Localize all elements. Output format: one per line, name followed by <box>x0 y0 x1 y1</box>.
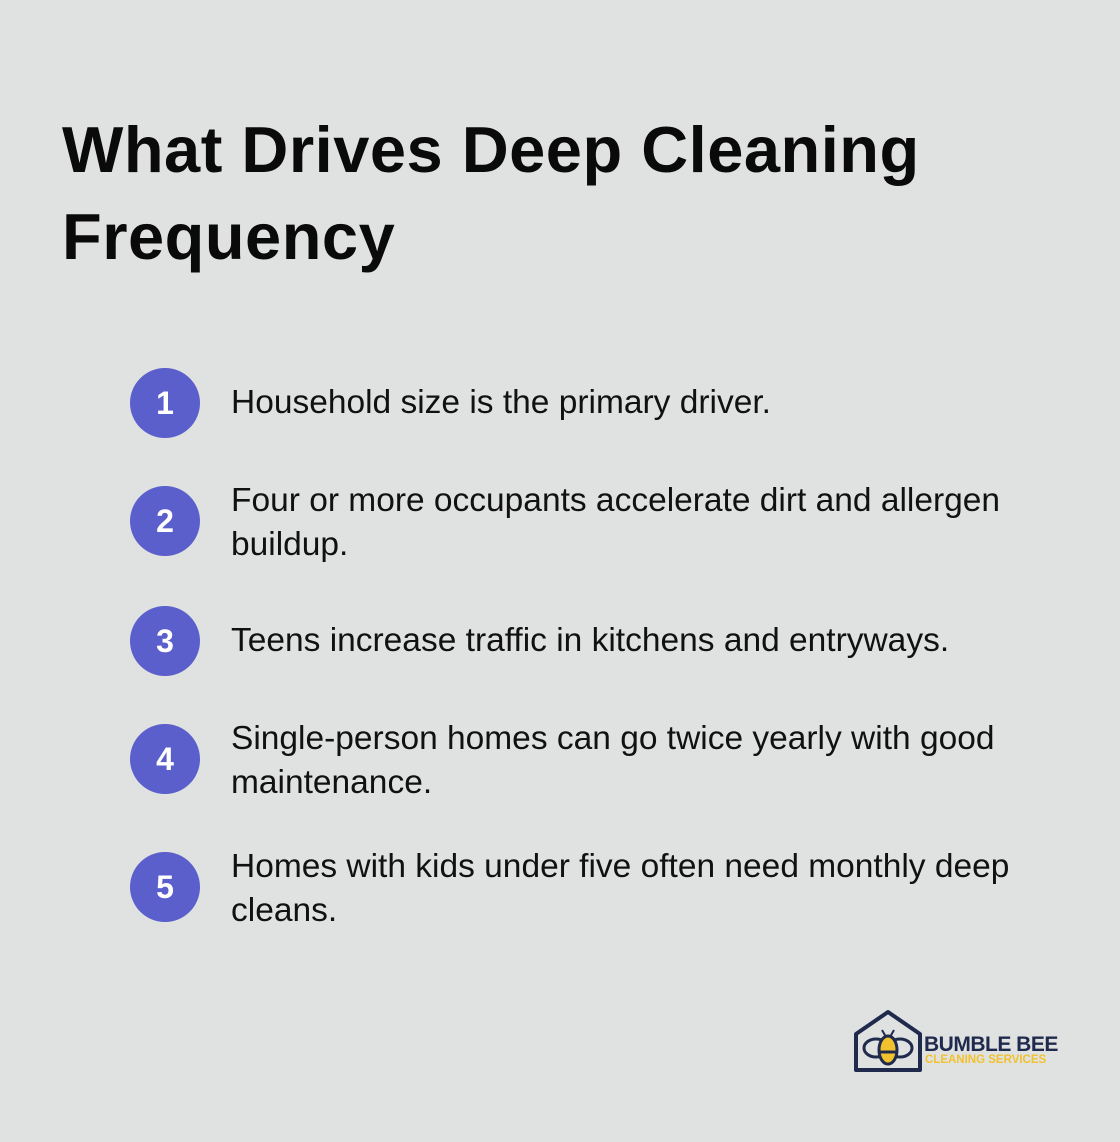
logo text: BUMBLE BEE <box>924 1033 1058 1056</box>
item 5: 5 <box>156 869 174 905</box>
title <box>62 113 920 273</box>
icon: bee house <box>854 1010 922 1072</box>
item 4: 4 <box>156 741 174 777</box>
title: Frequency <box>62 200 395 273</box>
item 3: 3 <box>156 623 174 659</box>
item 5 <box>130 848 1009 929</box>
item 1: 1 <box>156 385 174 421</box>
title: What Drives Deep Cleaning <box>62 113 920 186</box>
item 1: Household size is the primary driver. <box>231 384 771 421</box>
item 2: Four or more occupants accelerate dirt and allergen <box>231 482 1000 519</box>
item 4: maintenance. <box>231 764 432 801</box>
item 3 <box>130 606 949 676</box>
logo <box>854 1010 1058 1072</box>
logo: CLEANING SERVICES <box>925 1054 1046 1066</box>
item 2: buildup. <box>231 526 348 563</box>
item 3: Teens increase traffic in kitchens and entryways. <box>231 622 949 659</box>
item 2: 2 <box>156 503 174 539</box>
item 5: cleans. <box>231 892 337 929</box>
item 2 <box>130 482 1000 563</box>
item 4: Single-person homes can go twice yearly with good <box>231 720 994 757</box>
item 4 <box>130 720 994 801</box>
item 5: Homes with kids under five often need monthly deep <box>231 848 1009 885</box>
item 1 <box>130 368 771 438</box>
